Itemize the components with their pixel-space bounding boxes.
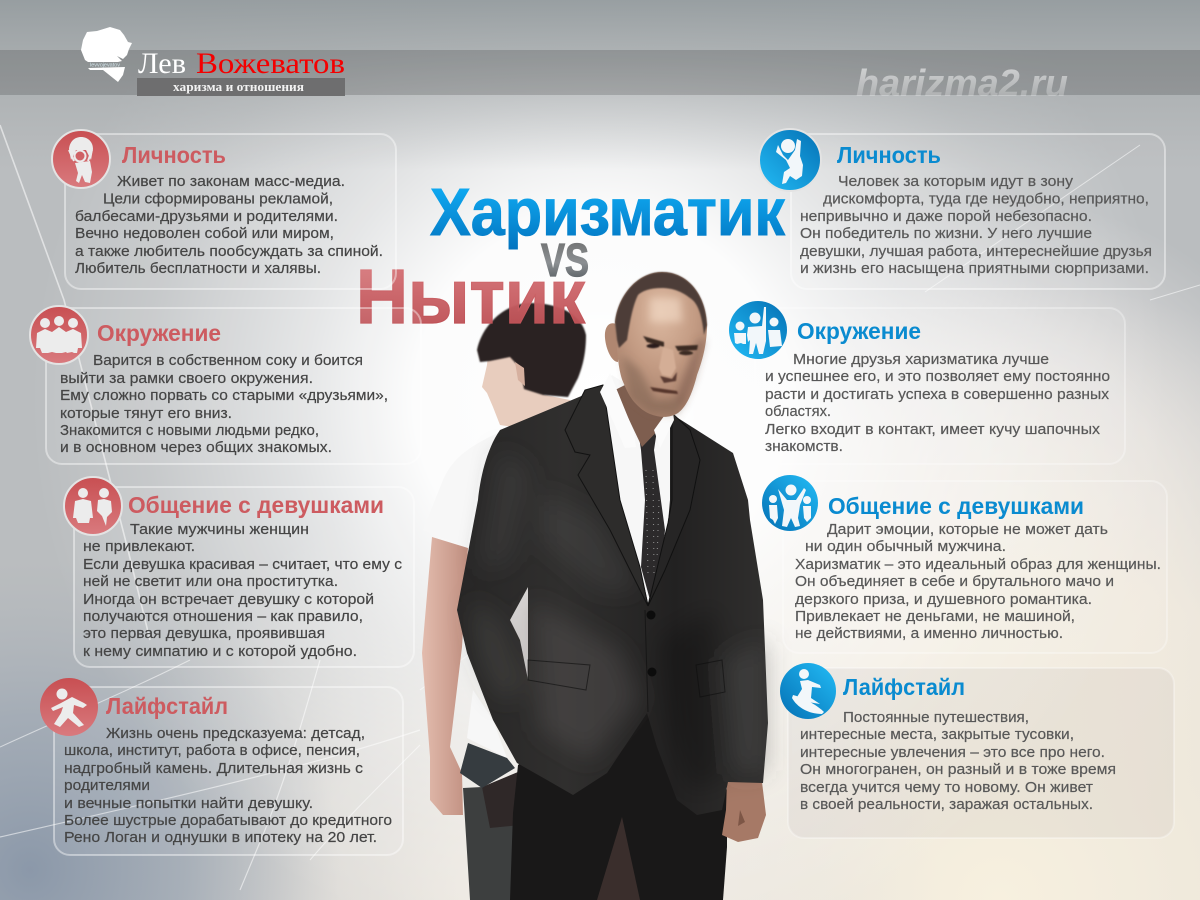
icon: figure lifting sphere bbox=[759, 129, 821, 191]
body text bbox=[60, 352, 388, 456]
panel: left communication with girls bbox=[64, 477, 414, 667]
body text: дерзкого приза, и душевного романтика. bbox=[795, 591, 1092, 608]
facial features bbox=[622, 298, 705, 414]
heading: Окружение bbox=[97, 320, 221, 346]
body text: Легко входит в контакт, имеет кучу шапочных bbox=[765, 421, 1101, 438]
shirt bbox=[601, 375, 670, 603]
tie bbox=[638, 430, 665, 600]
body text bbox=[64, 725, 392, 846]
logo bbox=[81, 27, 345, 96]
heading: Лайфстайл bbox=[843, 674, 965, 700]
jeans bbox=[463, 787, 520, 900]
panel box bbox=[65, 134, 396, 289]
title: Харизматик: Харизматик bbox=[430, 175, 785, 250]
body text: Любитель бесплатности и халявы. bbox=[75, 260, 321, 277]
title: Нытик: Нытик bbox=[356, 254, 585, 340]
body text: ни один обычный мужчина. bbox=[805, 538, 1006, 555]
body text: Живет по законам масс-медиа. bbox=[117, 173, 345, 190]
body text: интересные увлечения – это все про него. bbox=[800, 744, 1105, 761]
body text: дискомфорта, туда где неудобно, неприятно, bbox=[823, 190, 1149, 208]
body text: Вечно недоволен собой или миром, bbox=[75, 225, 334, 242]
left lapel bbox=[565, 385, 648, 606]
figure: man in suit bbox=[457, 272, 768, 900]
body text: и жизнь его насыщена приятными сюрпризами. bbox=[800, 260, 1149, 277]
body text: Ему сложно порвать со старыми «друзьями», bbox=[60, 387, 388, 404]
body text bbox=[795, 521, 1161, 642]
ear bbox=[605, 323, 618, 362]
ear bbox=[515, 362, 525, 386]
body text: Дарит эмоции, которые не может дать bbox=[827, 521, 1108, 538]
body text: и успешнее его, и это позволяет ему постоянно bbox=[765, 368, 1110, 385]
logo tagline: харизма и отношения bbox=[173, 79, 304, 94]
heading: Личность bbox=[122, 142, 226, 168]
icon: man with arms raised between women bbox=[762, 475, 818, 531]
face and neck bbox=[482, 355, 575, 428]
body text: и вечные попытки найти девушку. bbox=[64, 795, 313, 812]
body text: Он многогранен, он разный и в тоже время bbox=[800, 761, 1116, 778]
right hand bbox=[722, 780, 766, 842]
panel box bbox=[783, 481, 1167, 653]
gap at elbow bbox=[510, 587, 528, 680]
body text: Если девушка красивая – считает, что ему с bbox=[83, 556, 403, 573]
body text: Он объединяет в себе и брутального мачо и bbox=[795, 573, 1114, 590]
panel box bbox=[788, 668, 1174, 838]
body text: к нему симпатию и с которой удобно. bbox=[83, 643, 357, 660]
figure: young man behind bbox=[422, 303, 586, 900]
hair stubble bbox=[615, 272, 707, 348]
logo tagline bar bbox=[137, 78, 345, 96]
body text: Постоянные путешествия, bbox=[843, 709, 1029, 726]
hair bbox=[477, 303, 586, 397]
trousers bbox=[510, 700, 727, 900]
icon: leader with raised hand bbox=[729, 301, 787, 359]
heading: Общение с девушками bbox=[828, 493, 1084, 519]
collar bbox=[600, 373, 674, 448]
body text: Цели сформированы рекламой, bbox=[103, 190, 333, 208]
body text: не действиями, а именно личностью. bbox=[795, 625, 1063, 642]
body text: Иногда он встречает девушку с которой bbox=[83, 591, 374, 608]
body text: всегда учится чему то новому. Он живет bbox=[800, 779, 1093, 796]
icon: group of three bbox=[30, 306, 88, 364]
body text: получаются отношения – как правило, bbox=[83, 608, 363, 625]
body text: не привлекают. bbox=[83, 538, 195, 555]
body text: надгробный камень. Длительная жизнь с bbox=[64, 760, 364, 777]
arm bbox=[422, 537, 468, 815]
panel box bbox=[46, 308, 421, 464]
right lapel bbox=[648, 413, 700, 606]
body text: непривычно и даже порой небезопасно. bbox=[800, 208, 1092, 225]
body text: интересные места, закрытые тусовки, bbox=[800, 726, 1074, 743]
body text: Многие друзья харизматика лучше bbox=[793, 351, 1049, 368]
jacket seams bbox=[528, 610, 725, 712]
body text: школа, институт, работа в офисе, пенсия, bbox=[64, 742, 360, 759]
body text: родителями bbox=[64, 777, 150, 794]
body text: Знакомится с новыми людьми редко, bbox=[60, 422, 319, 439]
body text: Варится в собственном соку и боится bbox=[93, 352, 363, 369]
panel box bbox=[74, 487, 414, 667]
body text: Более шустрые дорабатывают до кредитного bbox=[64, 812, 392, 829]
body text: это первая девушка, проявившая bbox=[83, 625, 325, 642]
panel: right communication with girls bbox=[762, 475, 1167, 653]
logo small caption: levvojevatov bbox=[90, 62, 120, 68]
body text: и в основном через общих знакомых. bbox=[60, 439, 332, 456]
body text: областях. bbox=[765, 403, 831, 420]
panel: left personality bbox=[52, 130, 396, 289]
panel box bbox=[54, 687, 403, 855]
neck bbox=[615, 385, 672, 447]
icon: figure carrying weight bbox=[52, 130, 110, 188]
panel box bbox=[791, 134, 1165, 289]
body text: ней не светит или она проститутка. bbox=[83, 573, 338, 590]
body text: Жизнь очень предсказуема: детсад, bbox=[106, 725, 365, 742]
body text: знакомств. bbox=[765, 438, 843, 455]
panel box bbox=[755, 308, 1125, 464]
icon: man and woman bbox=[64, 477, 122, 535]
body text: Рено Логан и однушки в ипотеку на 20 лет. bbox=[64, 829, 377, 846]
body text: в своей реальности, заражая остальных. bbox=[800, 796, 1093, 813]
logo name: Лев bbox=[138, 47, 186, 80]
body text bbox=[800, 709, 1116, 813]
body text: Он победитель по жизни. У него лучшие bbox=[800, 225, 1092, 242]
heading: Лайфстайл bbox=[106, 693, 228, 719]
body text: расти и достигать успеха в совершенно разных bbox=[765, 386, 1110, 403]
head bbox=[615, 272, 707, 417]
body text bbox=[83, 521, 403, 660]
body text: Такие мужчины женщин bbox=[130, 521, 309, 538]
t-shirt bbox=[423, 432, 520, 560]
site watermark: harizma2.ru bbox=[856, 63, 1068, 105]
title: VS: VS bbox=[541, 234, 589, 286]
logo: Вожеватов bbox=[196, 47, 345, 80]
jacket buttons bbox=[646, 610, 656, 676]
icon: lion head bbox=[81, 27, 132, 82]
heading: Общение с девушками bbox=[128, 492, 384, 518]
icon: surfer bbox=[780, 663, 836, 719]
panel: right environment bbox=[729, 301, 1125, 464]
body text: а также любитель пообсуждать за спиной. bbox=[75, 243, 383, 260]
body text: Человек за которым идут в зону bbox=[838, 173, 1074, 190]
jacket highlights bbox=[470, 450, 765, 790]
body text: Харизматик – это идеальный образ для женщины. bbox=[795, 556, 1161, 573]
gap between legs bbox=[597, 817, 640, 900]
panel: right personality bbox=[759, 129, 1165, 289]
body text bbox=[800, 173, 1152, 277]
body text: которые тянут его вниз. bbox=[60, 405, 232, 422]
panel: right lifestyle bbox=[780, 663, 1174, 838]
icon: walking figure bbox=[40, 678, 98, 736]
heading: Окружение bbox=[797, 318, 921, 344]
body text: балбесами-друзьями и родителями. bbox=[75, 208, 338, 225]
body text bbox=[75, 173, 383, 277]
heading: Личность bbox=[837, 142, 941, 168]
body text: выйти за рамки своего окружения. bbox=[60, 370, 313, 387]
panel: left environment bbox=[30, 306, 421, 464]
panel: left lifestyle bbox=[40, 678, 403, 855]
body text: девушки, лучшая работа, интереснейшие друзья bbox=[800, 243, 1152, 260]
body text: Привлекает не деньгами, не машиной, bbox=[795, 608, 1075, 625]
jacket bbox=[457, 387, 768, 815]
top translucent band bbox=[0, 50, 1200, 95]
body text bbox=[765, 351, 1110, 455]
